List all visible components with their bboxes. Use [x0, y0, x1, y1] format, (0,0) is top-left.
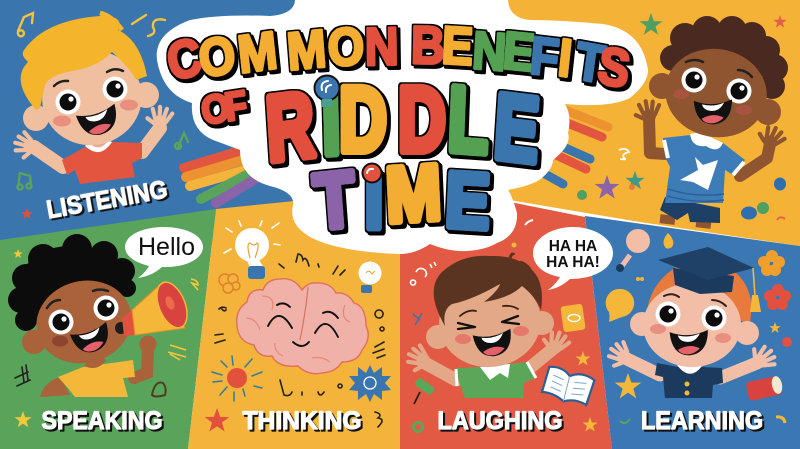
listening child — [11, 13, 173, 184]
ears — [630, 312, 654, 336]
title — [162, 15, 634, 246]
icon: open book — [541, 365, 595, 407]
icon: large light bulb — [224, 221, 280, 279]
speech bubble: hello: Hello — [138, 233, 195, 261]
label: learning: LEARNING — [641, 407, 763, 435]
cap board — [658, 247, 754, 280]
head — [433, 270, 547, 374]
decorations: speaking — [13, 249, 198, 427]
label: thinking: THINKING — [242, 407, 362, 435]
icon: red star — [205, 408, 229, 432]
speech bubble: ha ha: HA HA — [549, 238, 597, 255]
ears — [23, 105, 49, 131]
decorations: top right — [577, 13, 787, 220]
shirt — [62, 142, 142, 184]
hair — [647, 265, 751, 322]
speech bubble: hello — [125, 227, 203, 278]
arms — [625, 358, 757, 378]
ears — [649, 73, 675, 99]
arms — [649, 118, 770, 176]
icon: red star — [21, 208, 33, 219]
left hand — [604, 339, 636, 371]
shirt — [663, 134, 745, 203]
tassel — [753, 268, 755, 296]
icon: blue burst — [349, 365, 391, 402]
icon: bulb dot on riddle i — [314, 76, 340, 107]
icon: small light bulb — [358, 262, 382, 293]
shirt and arms — [40, 377, 70, 397]
left hand — [11, 131, 40, 160]
head — [658, 41, 774, 145]
eyes — [656, 302, 680, 326]
cheeks — [650, 324, 666, 334]
rainbow: left — [184, 148, 260, 203]
rainbow: right — [545, 110, 608, 184]
eyes — [682, 68, 706, 92]
label: listening: LISTENING — [44, 176, 170, 224]
brows — [47, 290, 108, 308]
right hand — [540, 328, 571, 358]
speech bubble: ha ha — [533, 227, 613, 290]
icon: music notes and marks — [17, 13, 188, 190]
label: speaking: SPEAKING — [42, 407, 162, 435]
right hand — [747, 342, 779, 374]
head — [643, 283, 741, 367]
panel: listening background — [0, 0, 420, 245]
head — [28, 271, 140, 373]
cheeks — [673, 89, 689, 99]
label: laughing: LAUGHING — [438, 407, 562, 435]
mouth — [692, 96, 732, 126]
right hand — [146, 105, 173, 130]
collar — [677, 365, 702, 374]
speech bubble: ha ha: HA HA! — [546, 254, 600, 271]
icon: red sun — [212, 356, 262, 401]
closed eyes — [458, 316, 519, 329]
collar — [690, 132, 723, 149]
shirt star — [680, 157, 718, 190]
eyes — [48, 310, 74, 334]
brain face — [268, 303, 338, 346]
shorts — [660, 197, 720, 223]
panel: learning background — [585, 216, 800, 449]
speaking child — [8, 234, 148, 397]
collar — [480, 364, 510, 380]
mouth — [69, 322, 112, 356]
decorations: laughing — [411, 220, 598, 432]
arms — [34, 128, 160, 167]
panel: laughing background — [400, 190, 612, 449]
mouth — [472, 329, 512, 357]
learning child — [604, 247, 779, 398]
brows — [664, 294, 726, 306]
brows — [686, 60, 752, 77]
brows — [54, 69, 123, 86]
legs — [667, 215, 704, 228]
icon: popcorn doodle — [219, 274, 240, 293]
hair — [660, 16, 788, 99]
title word: time: TIME — [311, 149, 492, 246]
brows — [460, 306, 518, 316]
title word: riddle: RIDDLE — [263, 66, 542, 182]
laughing child — [404, 254, 571, 398]
hair — [21, 16, 147, 110]
shirt — [655, 363, 723, 398]
head — [32, 40, 152, 156]
neck — [85, 135, 112, 152]
cheek — [52, 336, 68, 346]
hair — [434, 256, 542, 326]
panel: top right yellow background — [480, 0, 800, 246]
mouth — [75, 104, 119, 138]
hair — [8, 234, 136, 331]
title line: common benefits: COMMON BENEFITS — [162, 15, 634, 100]
cheeks — [455, 334, 471, 344]
panel: speaking background — [0, 209, 216, 449]
cap base — [673, 268, 734, 294]
doodle marks: thinking — [215, 254, 385, 427]
arms — [423, 348, 554, 380]
left hand — [635, 100, 661, 124]
left hand — [404, 343, 434, 375]
ears — [426, 325, 450, 349]
icon: megaphone — [115, 278, 193, 352]
mouth — [668, 327, 708, 357]
decorations: learning — [606, 229, 792, 423]
title word: of: OF — [198, 83, 250, 134]
panel: thinking background — [188, 190, 402, 449]
eyes — [56, 90, 80, 114]
cheeks — [53, 116, 71, 126]
right hand — [755, 123, 787, 153]
shirt — [455, 362, 537, 398]
ear — [22, 330, 46, 354]
brain — [237, 279, 368, 374]
title cloud — [157, 0, 648, 254]
top right child — [635, 16, 788, 228]
icon: dot on time i — [362, 164, 382, 182]
